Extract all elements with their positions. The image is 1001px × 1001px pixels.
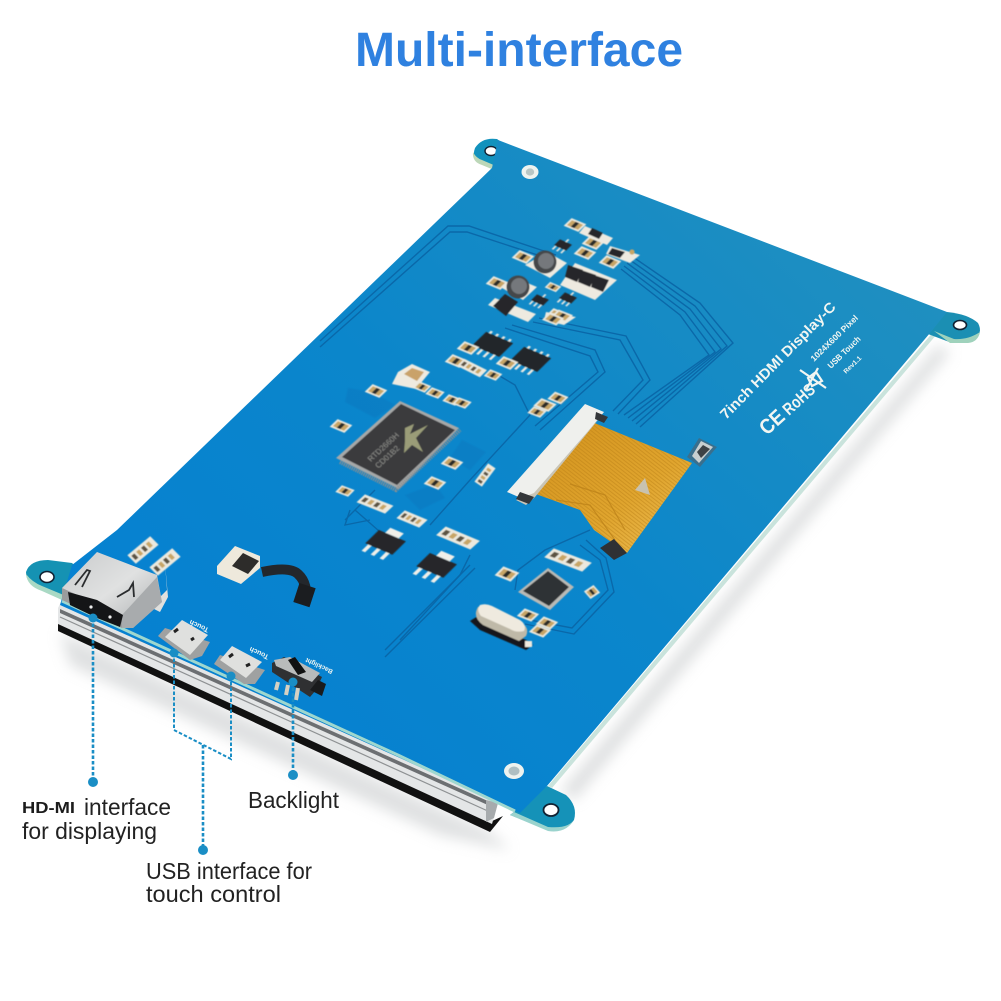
silkscreen text: Backlight (304, 656, 334, 675)
silkscreen text: CE (755, 405, 790, 440)
callout: backlight: Backlight (248, 787, 340, 813)
main QFP chip: CD01B2 (373, 444, 402, 470)
silkscreen text: 1024X600 Pixel (808, 313, 860, 363)
mounting holes on PCB (504, 165, 538, 779)
callout: HDMI: HD-MI (22, 800, 75, 817)
callout: HDMI: for displaying (22, 818, 157, 844)
callout: HDMI (22, 614, 171, 844)
logic ICs and passives (330, 330, 569, 584)
silkscreen text: Rev1.1 (843, 355, 864, 375)
LCD ribbon connector (507, 404, 717, 560)
power section components (486, 218, 640, 326)
small components near HDMI (127, 536, 181, 576)
icon: crossed-out bin (800, 368, 826, 390)
ground planes near main chip (345, 388, 486, 510)
silkscreen text: Touch (189, 618, 210, 633)
metal display frame (58, 600, 503, 832)
silkscreen text: RoHS (779, 380, 819, 419)
PCB surface (60, 140, 947, 813)
PCB front edge (62, 601, 515, 811)
HDMI connector (62, 552, 168, 628)
callout: USB touch: USB interface for (146, 858, 312, 884)
mounting tabs (26, 139, 980, 831)
micro USB connectors (158, 620, 265, 684)
silkscreen text: Touch (249, 645, 270, 660)
callout: backlight (248, 678, 340, 813)
touch flex connector (217, 546, 316, 607)
lower IC and crystal (470, 548, 600, 650)
main QFP chip: RTD2660H (366, 431, 401, 463)
main QFP chip (336, 401, 460, 490)
right side edge (548, 331, 937, 788)
title: Multi-interface (355, 24, 683, 77)
copper traces (320, 226, 733, 657)
callout: HDMI: interface (84, 794, 171, 820)
board shadow (60, 345, 950, 850)
display board photo (26, 139, 980, 850)
callout: USB touch (146, 648, 312, 907)
silkscreen text (189, 299, 864, 675)
backlight switch (272, 657, 326, 700)
callout: USB touch: touch control (146, 881, 281, 907)
silkscreen text: 7inch HDMI Display-C (717, 299, 840, 423)
silkscreen text: USB Touch (825, 334, 863, 370)
